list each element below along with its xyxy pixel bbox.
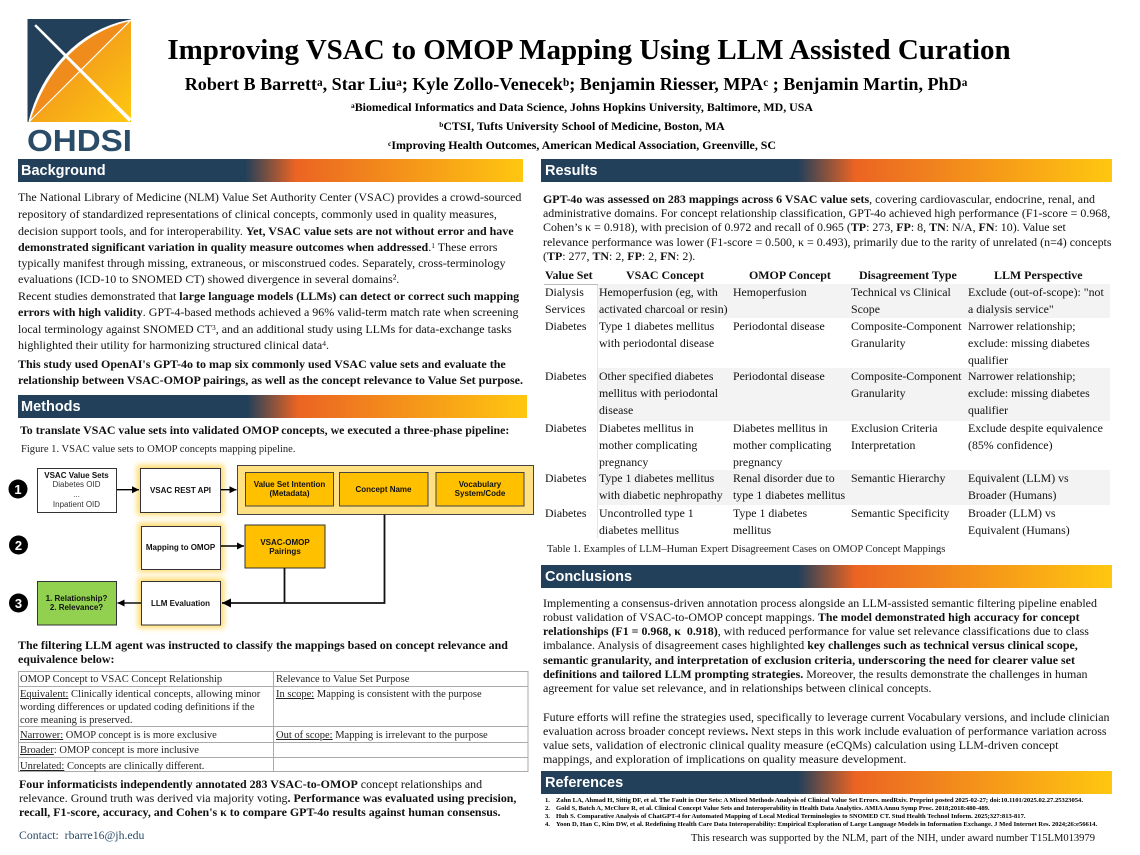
row: pregnancy: Exclusion Criteria [851, 421, 938, 435]
table: disagreement cases [544, 268, 1110, 538]
row: pregnancy: mother complicating [733, 438, 831, 452]
row: nephropathy: Renal disorder due to [733, 471, 835, 485]
row: nephropathy: type 1 diabetes mellitus [733, 488, 845, 502]
text block: background: demonstrated significant variation in quality measure outcomes when addressed.1 These errors [18, 240, 497, 254]
text block: results summary: relevance performance was lower (F1-score = 0.500, κ = 0.493), primarily due to the rarity of unrelated (n=4) concepts [543, 235, 1112, 249]
list: references: 3. [545, 813, 550, 820]
row: periodontal 1: with periodontal disease [599, 336, 714, 350]
table caption: Table 1. Examples of LLM–Human Expert Disagreement Cases on OMOP Concept Mappings [547, 544, 945, 555]
box: LLM Evaluation: LLM Evaluation [151, 599, 210, 608]
figure caption: Figure 1. VSAC value sets to OMOP concepts mapping pipeline. [21, 444, 296, 455]
heading: References: References [545, 775, 623, 791]
row: pregnancy: Diabetes mellitus in [599, 421, 694, 435]
row: periodontal 2: qualifier [968, 403, 1008, 417]
row: periodontal 2: exclude: missing diabetes [968, 386, 1090, 400]
row: pregnancy: Exclude despite equivalence [968, 421, 1103, 435]
text block: background: highlighted their utility for harmonizing structured clinical data4. [18, 338, 329, 352]
box: Mapping to OMOP [138, 523, 224, 572]
box: Vocabulary System/Code [436, 472, 524, 506]
text block: background [18, 190, 523, 387]
table: classification definitions: Out of scope: Mapping is irrelevant to the purpose [276, 730, 488, 741]
list: references: 1. [545, 797, 550, 804]
box: Value Set Intention: (Metadata) [269, 489, 310, 498]
text block: conclusions: evaluation across broader concept reviews. Next steps in this work include evaluation of performance variation across [543, 724, 1107, 738]
text: pipeline intro: To translate VSAC value sets into validated OMOP concepts, we executed a three-phase pipeline: [20, 423, 509, 437]
box: VSAC REST API [137, 465, 224, 515]
row: periodontal 1: qualifier [968, 353, 1008, 367]
table: classification definitions: wording differences or updated coding definitions if the [20, 702, 255, 713]
box: Relationship and Relevance questions: 1. Relationship? [46, 594, 108, 603]
list: references: 4. [545, 821, 550, 828]
box: Relationship and Relevance questions: 2. Relevance? [50, 603, 103, 612]
row: periodontal 1 [545, 319, 1090, 367]
table header: OMOP Concept [749, 268, 831, 282]
row: uncontrolled: diabetes mellitus [599, 523, 679, 537]
text block: results summary: (TP: 277, TN: 2, FP: 2, FN: 2). [543, 249, 695, 263]
text block: background: typically manifest through missing, extraneous, or misconstrued codes. Separately, cross-terminology [18, 256, 505, 270]
row: periodontal 2 [545, 368, 1110, 421]
text: annotation and evaluation: relevance. Ground truth was derived via majority voting. Performance was evaluated using precision, [19, 791, 516, 805]
table header: Disagreement Type [859, 268, 957, 282]
table header: VSAC Concept [626, 268, 704, 282]
box: Vocabulary System/Code: System/Code [455, 489, 506, 498]
box: VSAC Value Sets: VSAC Value Sets [44, 471, 109, 480]
list: references: Zahn LA, Ahmad H, Sittig DF, et al. The Fault in Our Sets: A Mixed Methods Analysis of Clinical Value Set Errors. medRxiv. Preprint posted 2025-02-27; doi:10.1101/2025.02.27.25323054. [556, 797, 1083, 804]
row: uncontrolled: Uncontrolled type 1 [599, 506, 694, 520]
row: pregnancy: Diabetes [545, 421, 586, 435]
table: classification definitions: Unrelated: Concepts are clinically different. [20, 761, 204, 772]
affiliations: cImproving Health Outcomes, American Medical Association, Greenville, SC [388, 138, 776, 152]
text: annotation and evaluation: Four informaticists independently annotated 283 VSAC-to-OMOP concept relationships and [19, 777, 482, 791]
authors: Robert B Barretta, Star Liua; Kyle Zollo-Venecekb; Benjamin Riesser, MPAc ; Benjamin Martin, PhDa [185, 74, 967, 94]
box: VSAC-OMOP Pairings: VSAC-OMOP [260, 538, 310, 547]
heading: Background [18, 159, 523, 182]
text: filtering instructions: equivalence below: [18, 652, 114, 666]
text block: results summary [543, 192, 1112, 263]
box: VSAC-OMOP Pairings: Pairings [269, 547, 301, 556]
arrow: LLM evaluation to questions [118, 602, 141, 604]
text block: results summary: Cohen’s κ = 0.918), with precision of 0.972 and recall of 0.965 (TP: 273, FP: 8, TN: N/A, FN: 10). Value set [543, 220, 1066, 234]
row: nephropathy: Diabetes [545, 471, 586, 485]
icon: step 2: 2 [15, 538, 22, 553]
flow diagram: pipeline [8, 460, 534, 632]
affiliations: bCTSI, Tufts University School of Medicine, Boston, MA [439, 119, 725, 133]
heading: Methods: Methods [21, 399, 81, 415]
text block: background: evaluations (ICD-10 to SNOMED CT) showed divergence in several domains². [18, 272, 399, 286]
row: nephropathy: Broader (Humans) [968, 488, 1056, 502]
funding note: This research was supported by the NLM, part of the NIH, under award number T15LM013979 [691, 833, 1095, 844]
text block: background: errors with high validity. GPT-4-based methods achieved a 96% valid-term match rate when screening [18, 305, 519, 319]
text block: results summary: GPT-4o was assessed on 283 mappings across 6 VSAC value sets, covering cardiovascular, endocrine, renal, and [543, 192, 1095, 206]
row: hemoperfusion: Technical vs Clinical [851, 285, 951, 299]
box: VSAC Value Sets: Diabetes OID [52, 480, 101, 489]
row: hemoperfusion: a dialysis service" [968, 302, 1054, 316]
box: LLM Evaluation [138, 578, 224, 628]
text block: conclusions: agreement for value set relevance, and in relationships between clinical concepts. [543, 681, 931, 695]
row: hemoperfusion: Hemoperfusion [733, 285, 807, 299]
row: hemoperfusion: activated charcoal or resin) [599, 302, 728, 316]
box: VSAC Value Sets [38, 468, 116, 512]
row: pregnancy: (85% confidence) [968, 438, 1053, 452]
row: periodontal 1: Type 1 diabetes mellitus [599, 319, 714, 333]
text block: conclusions: Future efforts will refine the strategies used, specifically to leverage current Vocabulary versions, and include clinician [543, 710, 1110, 724]
text block: conclusions: Implementing a consensus-driven annotation process alongside an LLM-assisted semantic filtering pipeline enabled [543, 596, 1097, 610]
text block: conclusions: value sets, validation of electronic clinical quality measure (eCQMs) calculation using LLM-driven concept [543, 738, 1058, 752]
icon: step 2 [9, 536, 28, 554]
row: periodontal 1: Granularity [851, 336, 906, 350]
box: Concept Name: Concept Name [355, 485, 412, 494]
row: periodontal 1: Narrower relationship; [968, 319, 1076, 333]
text: annotation and evaluation: recall, F1-score, accuracy, and Cohen's κ to compare GPT-4o results against human consensus. [19, 805, 500, 819]
row: uncontrolled: Type 1 diabetes [733, 506, 807, 520]
row: uncontrolled [545, 506, 1070, 537]
box: VSAC Value Sets: Inpatient OID [53, 500, 100, 509]
text block: conclusions: relationships (F1 = 0.968, κ 0.918), with reduced performance for value set relevance classifications due to class [543, 624, 1089, 638]
row: pregnancy [545, 421, 1103, 469]
text: filtering instructions: The filtering LLM agent was instructed to classify the mappings based on concept relevance and [18, 638, 508, 652]
heading: References [541, 771, 1112, 794]
heading: Conclusions: Conclusions [545, 569, 632, 585]
heading: Background: Background [21, 163, 106, 179]
text block: background: decision support tools, and for interoperability. Yet, VSAC value sets are not without error and have [18, 224, 514, 238]
arrow: mapping to pairings [221, 545, 244, 547]
row: periodontal 1: Diabetes [545, 319, 586, 333]
heading: Results [541, 159, 1112, 182]
box: Mapping to OMOP: Mapping to OMOP [146, 543, 216, 552]
row: periodontal 2: Periodontal disease [733, 369, 825, 383]
box: Relationship and Relevance questions [38, 582, 116, 625]
arrow: metadata to LLM evaluation [222, 514, 384, 603]
row: nephropathy: Semantic Hierarchy [851, 471, 945, 485]
text block: background: relationship between VSAC-OMOP pairings, as well as the concept relevance to Value Set purpose. [18, 373, 523, 387]
row: periodontal 1: Composite-Component [851, 319, 962, 333]
row: hemoperfusion: Services [545, 302, 585, 316]
row: hemoperfusion [545, 284, 1110, 318]
box: VSAC Value Sets: ... [73, 490, 80, 499]
box: VSAC REST API: VSAC REST API [150, 486, 211, 495]
row: pregnancy: mother complicating [599, 438, 697, 452]
table: classification definitions: Narrower: OMOP concept is is more exclusive [20, 730, 217, 741]
row: periodontal 2: Narrower relationship; [968, 369, 1076, 383]
text block: background: This study used OpenAI's GPT-4o to map six commonly used VSAC value sets and evaluate the [18, 357, 506, 371]
row: pregnancy: Diabetes mellitus in [733, 421, 828, 435]
table: classification definitions: Broader: OMOP concept is more inclusive [20, 745, 199, 756]
box: Value Set Intention: Value Set Intention [254, 480, 325, 489]
table header: Value Set [545, 268, 593, 282]
text block: conclusions [543, 596, 1110, 766]
affiliations: aBiomedical Informatics and Data Science, Johns Hopkins University, Baltimore, MD, USA [351, 100, 813, 114]
text: filtering instructions [18, 638, 508, 666]
icon: step 3: 3 [15, 596, 22, 611]
list: references [545, 797, 1097, 828]
table header [544, 268, 1110, 285]
logo: OHDSI [27, 19, 132, 154]
table: classification definitions: Equivalent: Clinically identical concepts, allowing minor [20, 689, 260, 700]
text block: results summary: administrative domains. For concept relationship classification, GPT-4o achieved high performance (F1-score = 0.968, [543, 206, 1110, 220]
row: nephropathy: Equivalent (LLM) vs [968, 471, 1069, 485]
heading: Results: Results [545, 163, 597, 179]
row: periodontal 2: Other specified diabetes [599, 369, 713, 383]
box: VSAC-OMOP Pairings [245, 525, 325, 568]
heading: Methods [18, 395, 527, 418]
icon: step 1: 1 [14, 482, 22, 497]
text block: conclusions: mappings, and exploration of implications on quality measure development. [543, 752, 906, 766]
title: Improving VSAC to OMOP Mapping Using LLM Assisted Curation [167, 34, 1011, 66]
text: annotation and evaluation [19, 777, 516, 819]
box: Concept Name [340, 472, 428, 506]
row: hemoperfusion: Exclude (out-of-scope): "not [968, 285, 1104, 299]
affiliations [351, 100, 813, 152]
row: periodontal 1: Periodontal disease [733, 319, 825, 333]
row: uncontrolled: Equivalent (Humans) [968, 523, 1070, 537]
panel: metadata container [238, 466, 534, 514]
table header: LLM Perspective [994, 268, 1083, 282]
row: pregnancy: pregnancy [733, 455, 782, 469]
row: uncontrolled: Diabetes [545, 506, 586, 520]
row: nephropathy [545, 470, 1110, 505]
text block: background: repository of standardized representations of clinical concepts, commonly used in quality measures, [18, 207, 497, 221]
arrow: API to metadata [221, 489, 236, 491]
row: periodontal 2: Granularity [851, 386, 906, 400]
text block: conclusions: definitions and tailored LLM prompting strategies. Moreover, the results demonstrate the challenges in human [543, 667, 1088, 681]
table: classification definitions [18, 671, 528, 772]
row: periodontal 1: exclude: missing diabetes [968, 336, 1090, 350]
row: periodontal 2: mellitus with periodontal [599, 386, 718, 400]
row: uncontrolled: mellitus [733, 523, 771, 537]
row: periodontal 2: Diabetes [545, 369, 586, 383]
table: classification definitions: In scope: Mapping is consistent with the purpose [276, 689, 482, 700]
box: Vocabulary System/Code: Vocabulary [459, 480, 502, 489]
row: nephropathy: with diabetic nephropathy [599, 488, 723, 502]
row: pregnancy: pregnancy [599, 455, 648, 469]
arrow: value sets to API [117, 489, 139, 491]
text block: background: The National Library of Medicine (NLM) Value Set Authority Center (VSAC) provides a crowd-sourced [18, 190, 521, 204]
icon: step 3 [9, 594, 28, 612]
table: classification definitions: Relevance to Value Set Purpose [276, 674, 409, 685]
text block: background: Recent studies demonstrated that large language models (LLMs) can detect or correct such mapping [18, 289, 519, 303]
heading: Conclusions [541, 565, 1112, 588]
row: hemoperfusion: Dialysis [545, 285, 584, 299]
row: nephropathy: Type 1 diabetes mellitus [599, 471, 714, 485]
row: uncontrolled: Broader (LLM) vs [968, 506, 1056, 520]
table: classification definitions: OMOP Concept to VSAC Concept Relationship [20, 674, 222, 685]
row: hemoperfusion: Hemoperfusion (eg, with [599, 285, 718, 299]
text block: conclusions: imbalance. Analysis of disagreement cases highlighted key challenges such as technical versus clinical scope, [543, 638, 1078, 652]
row: hemoperfusion: Scope [851, 302, 880, 316]
list: references: Gold S, Batch A, McClure R, et al. Clinical Concept Value Sets and Interoperability in Health Data Analytics. AMIA Annu Symp Proc. 2018;2018:480-489. [556, 805, 990, 812]
arrow: pairings to LLM evaluation [284, 568, 286, 603]
list: references: 2. [545, 805, 550, 812]
text block: background: local terminology against SNOMED CT3, and an additional study using LLMs for data-exchange tasks [18, 322, 512, 336]
row: uncontrolled: Semantic Specificity [851, 506, 949, 520]
box: Value Set Intention [246, 472, 334, 506]
icon: step 1 [8, 480, 28, 498]
list: references: Yoon D, Han C, Kim DW, et al. Redefining Health Care Data Interoperability: Empirical Exploration of Large Language Models in Information Exchange. J Med Internet Res. 2024;26:e56614. [556, 821, 1097, 828]
text block: conclusions: robust validation of VSAC-to-OMOP concept mappings. The model demonstrated high accuracy for concept [543, 610, 1080, 624]
table: classification definitions: core meaning is preserved. [20, 715, 133, 726]
list: references: Huh S. Comparative Analysis of ChatGPT-4 for Automated Mapping of Local Medical Terminologies to SNOMED CT. Stud Health Technol Inform. 2025;327:813-817. [556, 813, 1026, 820]
contact: Contact: rbarre16@jh.edu [19, 829, 144, 842]
row: pregnancy: Interpretation [851, 438, 915, 452]
row: periodontal 2: disease [599, 403, 633, 417]
row: periodontal 2: Composite-Component [851, 369, 962, 383]
text block: conclusions: semantic granularity, and interpretation of exclusion criteria, underscoring the need for clearer value set [543, 653, 1075, 667]
